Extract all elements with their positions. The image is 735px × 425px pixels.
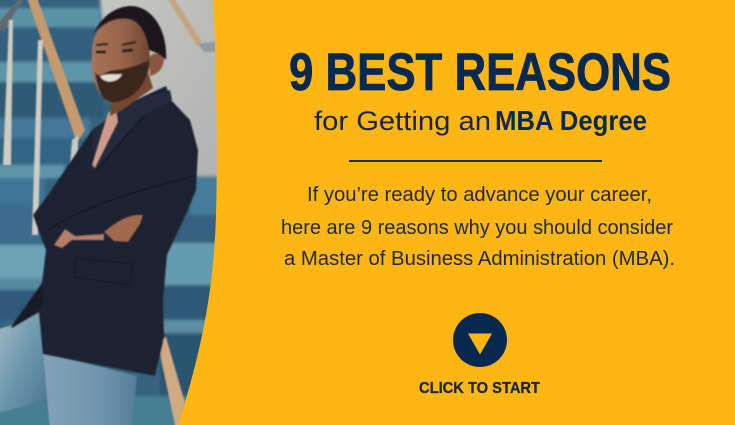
staircase and wall backdrop	[0, 0, 230, 425]
shirt	[92, 108, 118, 168]
handrails and posts	[0, 0, 225, 425]
subtitle: MBA Degree	[495, 105, 647, 136]
intro text	[281, 183, 675, 270]
neck	[110, 72, 153, 116]
blazer	[10, 86, 198, 376]
photo: man leaning on a staircase	[0, 0, 230, 425]
head	[92, 6, 166, 102]
jeans	[0, 310, 137, 425]
hand and wrist	[54, 215, 143, 248]
subtitle	[314, 105, 647, 136]
intro text: a Master of Business Administration (MBA).	[284, 247, 675, 270]
intro text: here are 9 reasons why you should consider	[281, 216, 673, 239]
icon: start button with down arrow	[453, 313, 507, 367]
call to action: CLICK TO START	[419, 380, 540, 397]
intro text: If you’re ready to advance your career,	[307, 183, 652, 206]
divider	[349, 160, 602, 162]
subtitle: for Getting an	[314, 106, 491, 136]
